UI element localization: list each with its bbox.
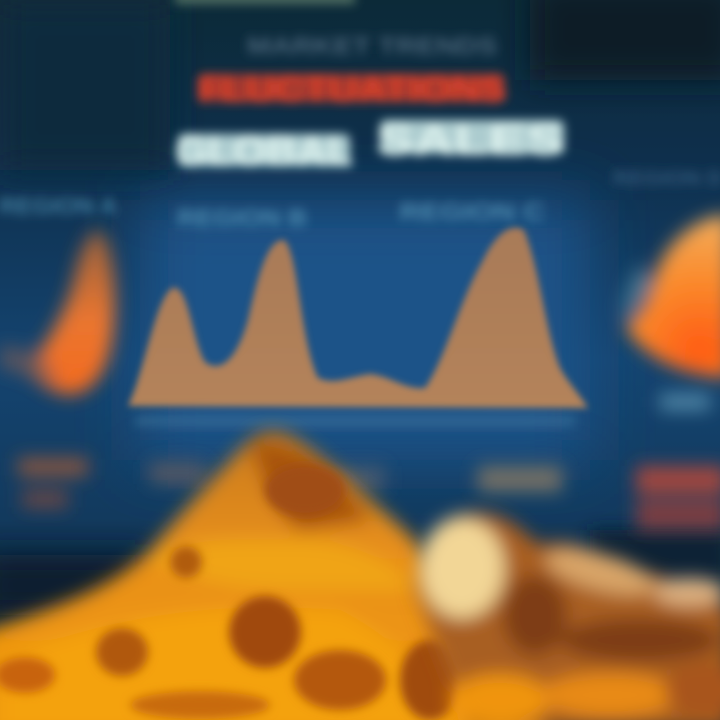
panel headings: REGION C [400, 199, 544, 226]
panel headings: REGION B [177, 205, 307, 232]
callouts: reddish values [18, 458, 720, 530]
chart: central area chart [128, 228, 588, 408]
cream mound [415, 512, 720, 720]
chart: right orange semicircle [623, 215, 720, 378]
title: white line: GLOBAL [175, 127, 353, 176]
orange mound [0, 431, 560, 720]
title: top line: MARKET TRENDS [247, 33, 497, 60]
label under right chart [660, 395, 710, 409]
panel headings: REGION D [613, 168, 720, 190]
chart: left orange peak [0, 231, 115, 395]
title: red line: FLUCTUATIONS [197, 69, 507, 111]
title: white line: SALES [376, 116, 564, 165]
title: white line [175, 116, 564, 176]
chart axis labels [135, 416, 575, 426]
panel headings: REGION A [0, 193, 117, 220]
panel headings [0, 168, 720, 232]
